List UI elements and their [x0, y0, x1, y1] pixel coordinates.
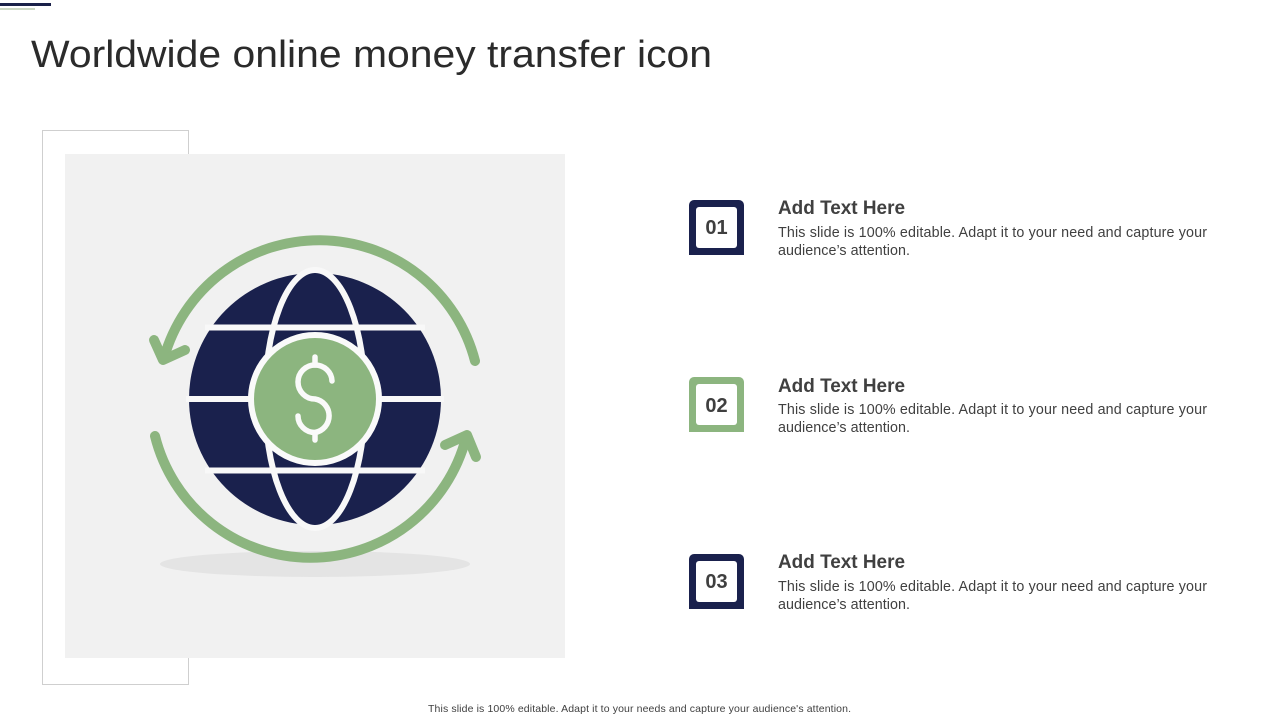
heading 01: Add Text Here [778, 197, 905, 219]
badge 01: 01 [705, 217, 728, 239]
badge 01 [689, 200, 744, 255]
footer note: This slide is 100% editable. Adapt it to your needs and capture your audience's attention. [428, 703, 851, 715]
body text 03: audience’s attention. [778, 597, 910, 613]
badge 03 [689, 554, 744, 609]
body text 02: This slide is 100% editable. Adapt it to your need and capture your [778, 402, 1207, 418]
icon: globe with dollar coin [186, 270, 444, 528]
icon: ground shadow [160, 551, 470, 577]
body text 01: audience’s attention. [778, 243, 910, 259]
item 01 [689, 197, 1207, 259]
panel: icon background [65, 154, 565, 658]
title: Worldwide online money transfer icon [31, 34, 712, 76]
badge 02 [689, 377, 744, 432]
heading 02: Add Text Here [778, 375, 905, 397]
arrow: bottom circular arrow [155, 435, 476, 558]
body text 01: This slide is 100% editable. Adapt it to your need and capture your [778, 225, 1207, 241]
badge 03: 03 [705, 571, 728, 593]
icon: dollar sign [298, 357, 332, 440]
arrow: top circular arrow [154, 240, 475, 361]
body text 03 [778, 579, 1207, 613]
heading 03: Add Text Here [778, 551, 905, 573]
body text 02 [778, 402, 1207, 436]
body text 03: This slide is 100% editable. Adapt it to your need and capture your [778, 579, 1207, 595]
body text 01 [778, 225, 1207, 259]
body text 02: audience’s attention. [778, 420, 910, 436]
badge 02: 02 [705, 395, 728, 417]
item 03 [689, 551, 1207, 613]
item 02 [689, 375, 1207, 436]
outlined frame behind icon panel [42, 130, 188, 684]
